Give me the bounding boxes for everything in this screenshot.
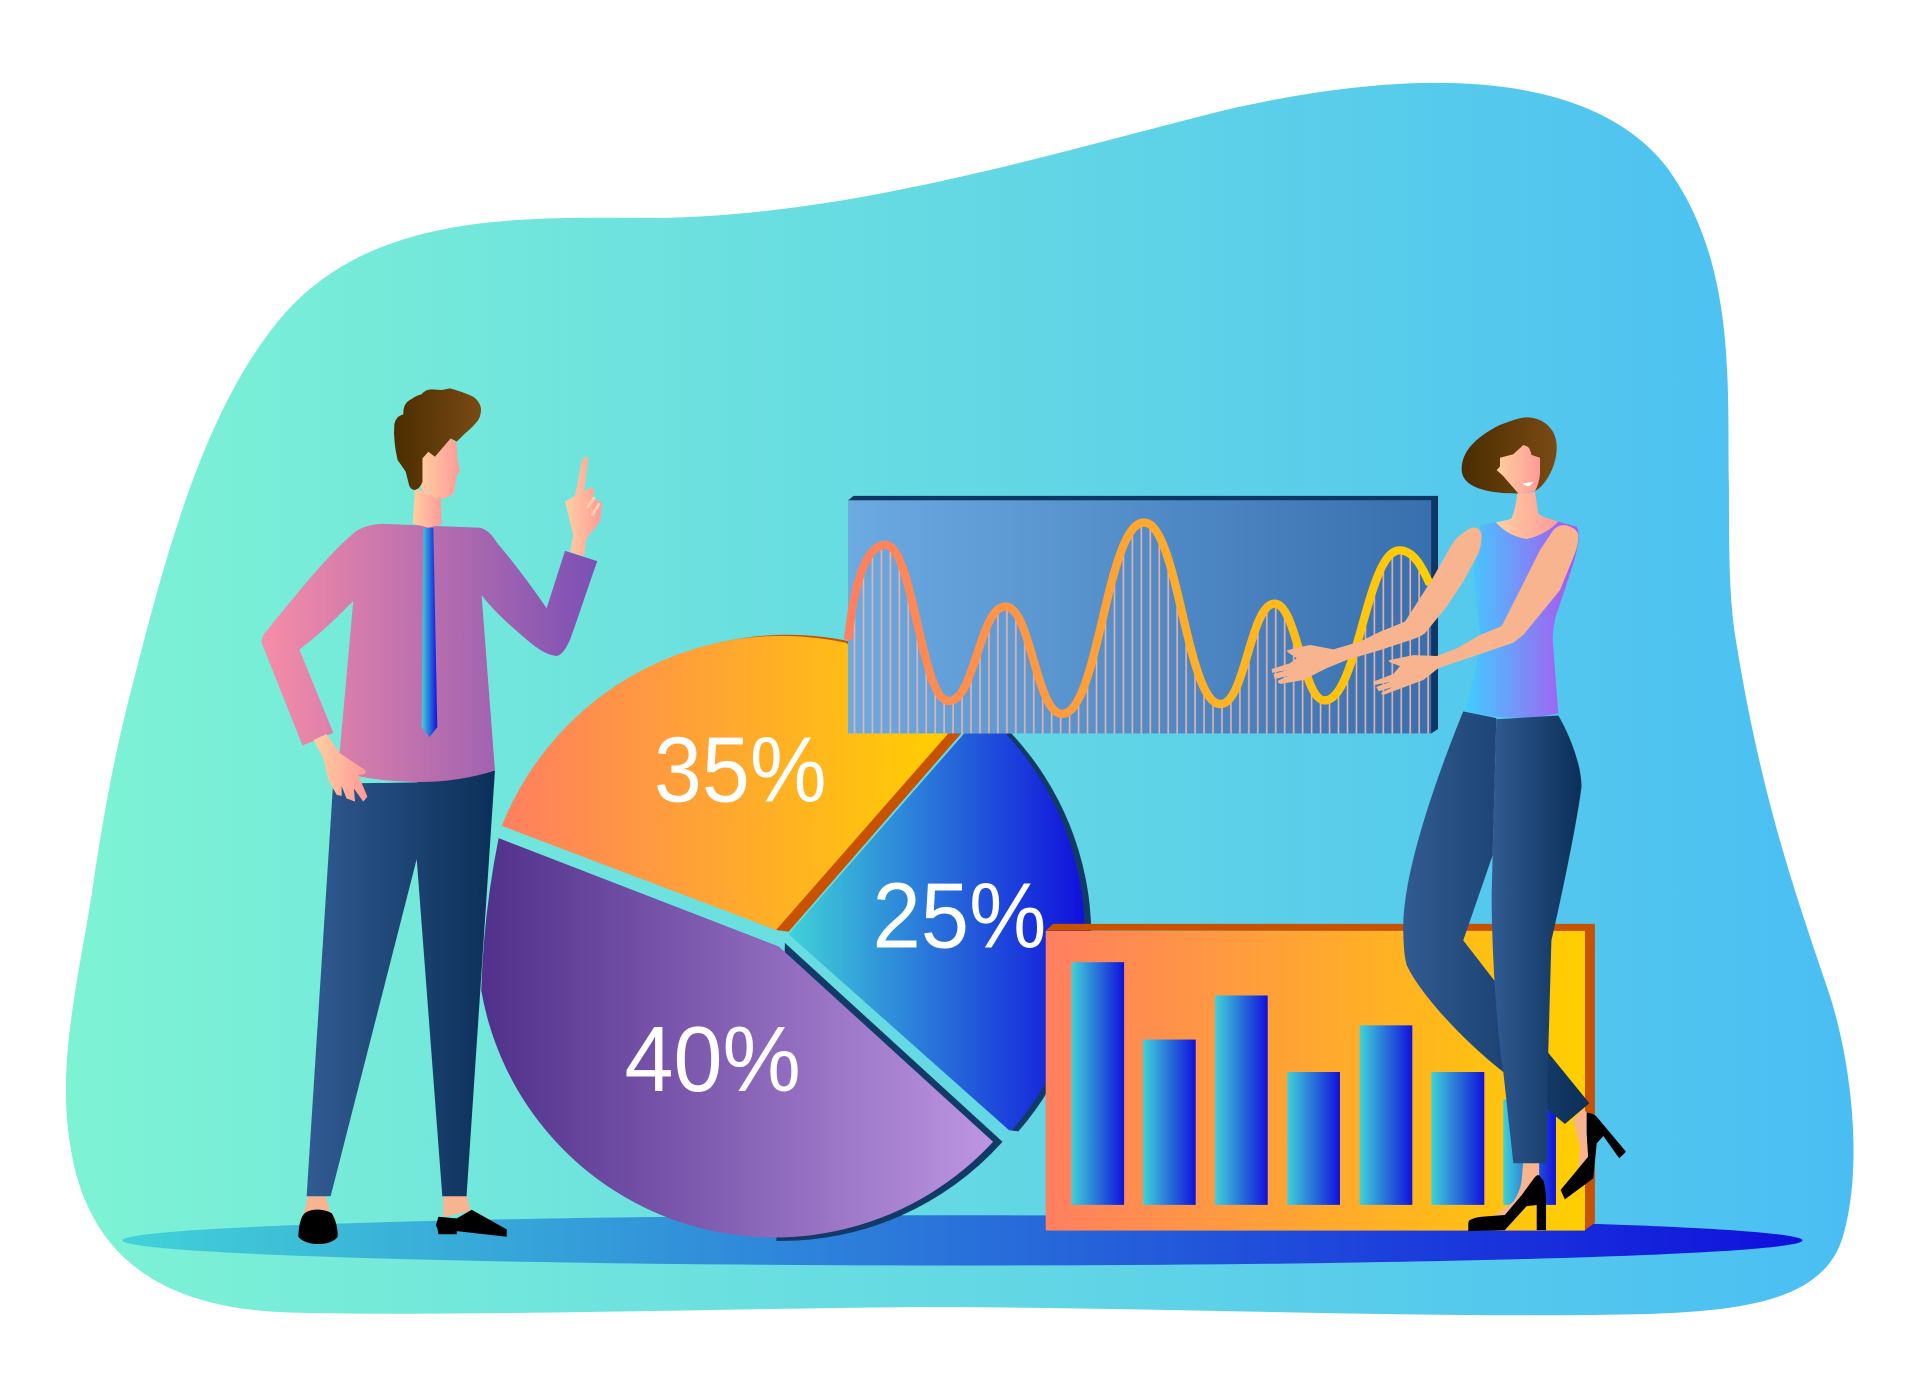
woman: front leg [1492, 715, 1582, 1163]
man: raised hand [565, 457, 602, 557]
woman: hair [1462, 417, 1557, 493]
man: right shoe [436, 1210, 507, 1237]
label: 40%: 40% [624, 1007, 801, 1111]
vertical sample lines [848, 514, 1431, 733]
man: curled fingers [588, 498, 599, 514]
woman: far arm and hand [1272, 527, 1482, 684]
ground shadow [122, 1215, 1802, 1265]
bars [1071, 962, 1556, 1205]
woman: sleeveless top [1465, 522, 1579, 718]
pie slice: 40% purple [481, 838, 1002, 1241]
man: lower hand [313, 734, 367, 802]
woman: back foot skin [1573, 1108, 1588, 1168]
wave line [848, 523, 1430, 714]
woman: neck and chest [1496, 492, 1558, 539]
man: ankles [304, 1194, 470, 1217]
woman: front high heel [1468, 1175, 1546, 1231]
man: trousers [307, 771, 495, 1196]
label: 25%: 25% [872, 864, 1046, 968]
man: shirt [262, 524, 597, 782]
man: tie [422, 528, 437, 737]
bar chart board [1046, 924, 1595, 1231]
woman: back leg [1403, 711, 1589, 1124]
man figure [262, 388, 602, 1244]
wave chart panel [848, 496, 1438, 733]
pie chart [481, 635, 1091, 1241]
woman: face [1497, 445, 1540, 493]
man: left shoe [298, 1210, 338, 1244]
pie slice: 25% blue [789, 733, 1091, 1131]
pie slice: 35% orange [502, 635, 961, 932]
man: face [419, 438, 460, 498]
woman figure [1272, 417, 1626, 1231]
label: 35%: 35% [654, 717, 827, 821]
woman: front foot skin [1493, 1161, 1539, 1215]
woman: near arm and hand [1373, 525, 1578, 695]
woman: smile [1523, 482, 1533, 486]
man: hair [394, 388, 481, 490]
woman: back high heel [1561, 1113, 1626, 1199]
man: neck [413, 488, 442, 528]
